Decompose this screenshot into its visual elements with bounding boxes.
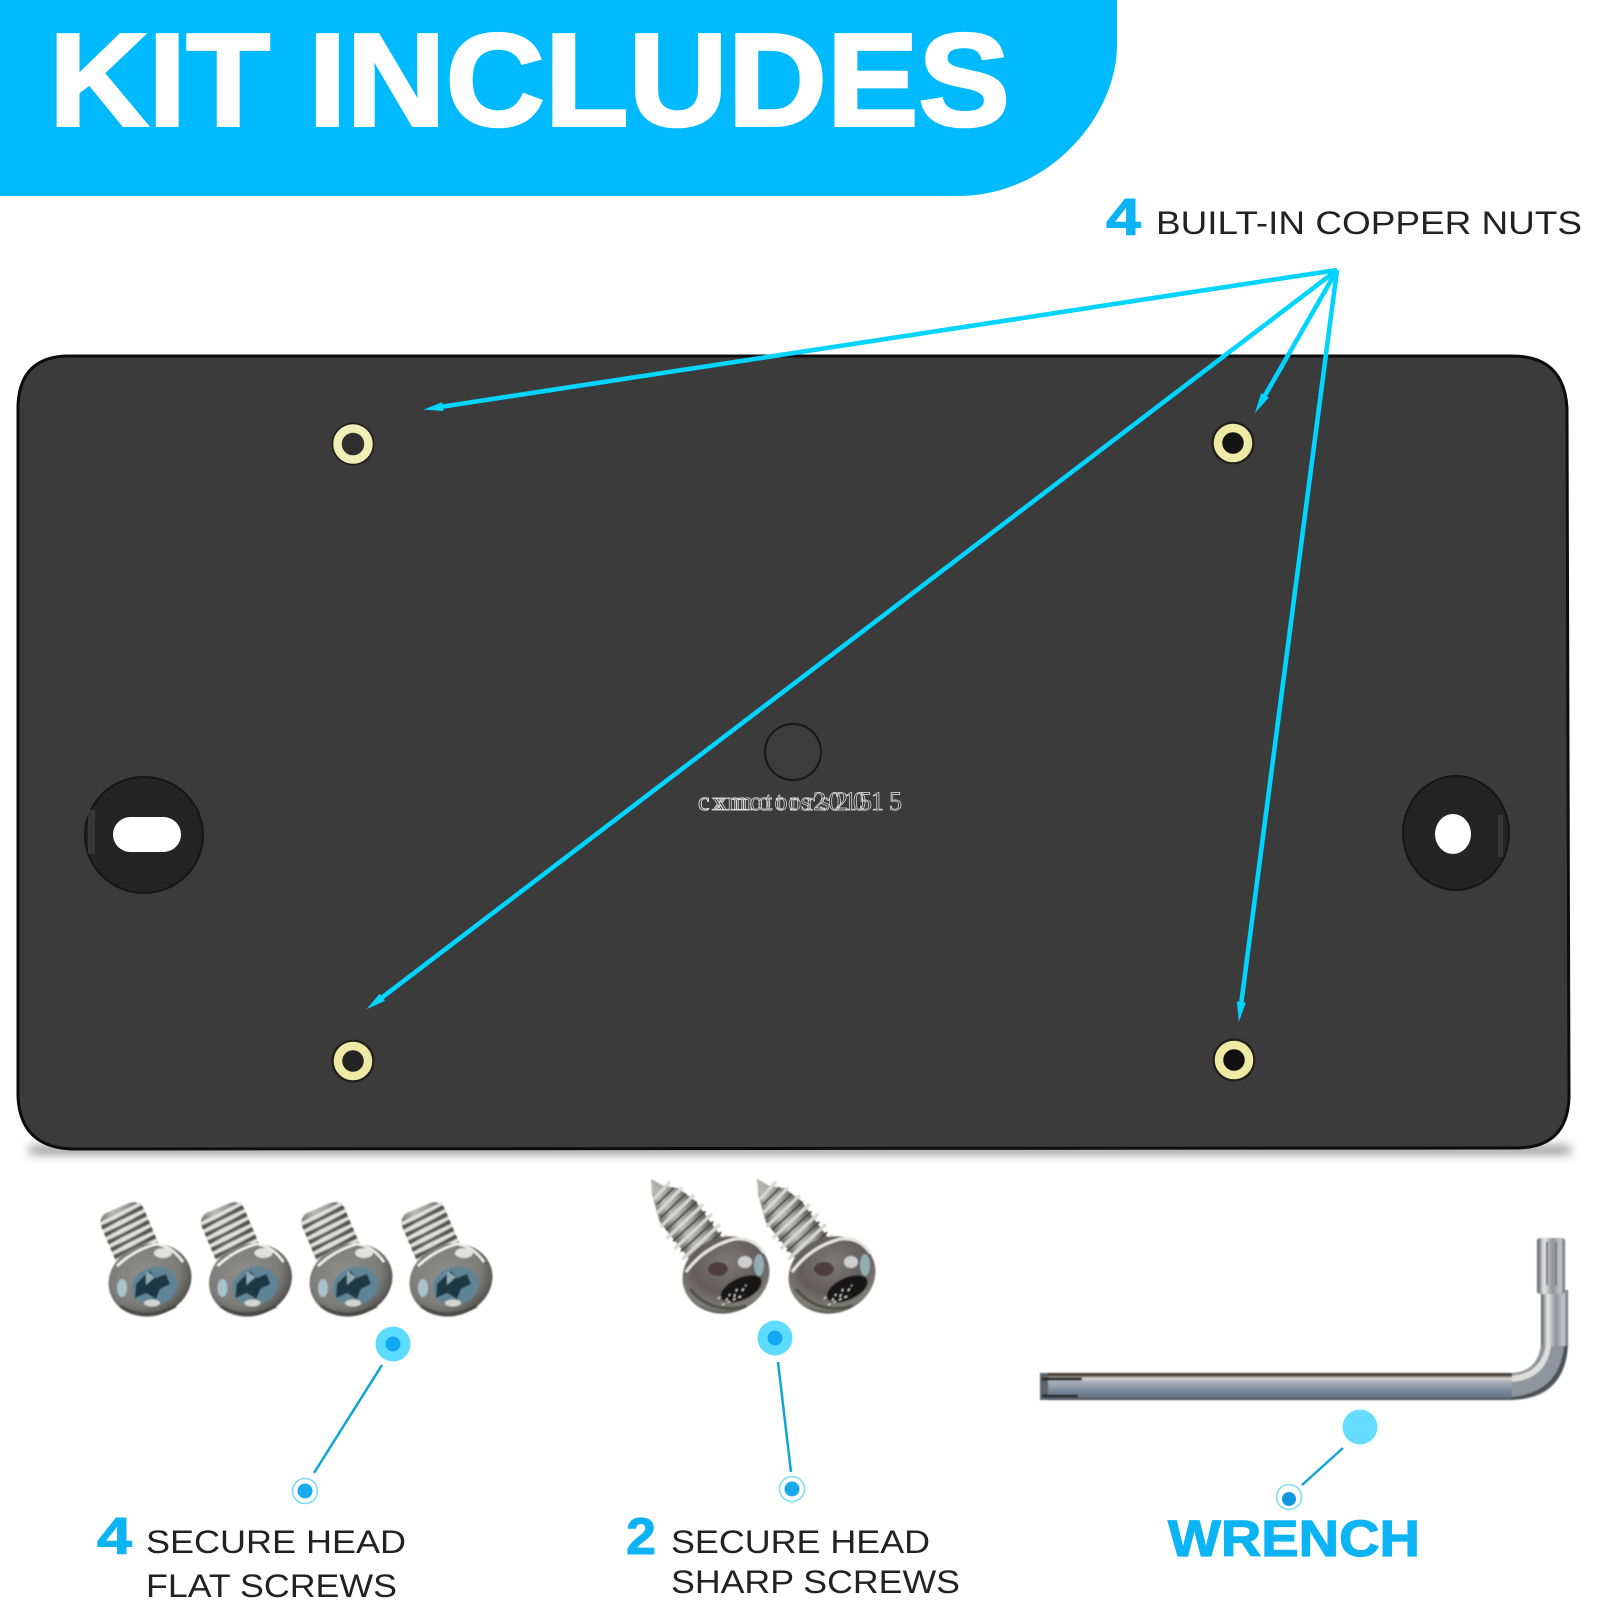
sharp screws	[633, 1163, 886, 1325]
arrows to copper nuts	[380, 270, 1337, 1005]
watermark: cxmotors2015	[698, 787, 872, 816]
label: sharp screws: SHARP SCREWS	[671, 1564, 960, 1600]
shadow under plate	[30, 1146, 1570, 1154]
label: flat screws: 4	[97, 1508, 132, 1566]
flat screws	[97, 1199, 502, 1327]
callout: flat screws connector	[292, 1326, 410, 1504]
copper nut: bottom right	[1212, 1038, 1256, 1082]
label: sharp screws: 2	[626, 1508, 656, 1566]
watermark: cxmotors2015	[698, 787, 902, 816]
callout: wrench connector	[1276, 1410, 1378, 1510]
label: wrench: WRENCH	[1168, 1510, 1420, 1567]
panel: title banner	[0, 0, 1117, 196]
copper nut: top left	[332, 422, 374, 466]
copper nut: bottom left	[332, 1040, 374, 1082]
label: sharp screws: SECURE HEAD	[671, 1524, 930, 1560]
left slot mount	[85, 777, 203, 893]
panel: black license plate bracket	[18, 356, 1569, 1149]
label: flat screws	[97, 1508, 406, 1600]
label: copper nuts: 4	[1106, 189, 1141, 247]
callout: sharp screws connector	[758, 1320, 804, 1502]
copper nut: top right	[1212, 422, 1254, 464]
wrench	[1040, 1238, 1568, 1400]
label: sharp screws	[626, 1508, 960, 1600]
label: copper nuts	[1106, 189, 1582, 247]
label: flat screws: SECURE HEAD	[146, 1524, 406, 1560]
center circle	[765, 724, 821, 780]
label: copper nuts: BUILT-IN COPPER NUTS	[1156, 205, 1582, 241]
heading: kit includes: KIT INCLUDES	[49, 6, 1010, 154]
right hole mount	[1403, 776, 1509, 890]
